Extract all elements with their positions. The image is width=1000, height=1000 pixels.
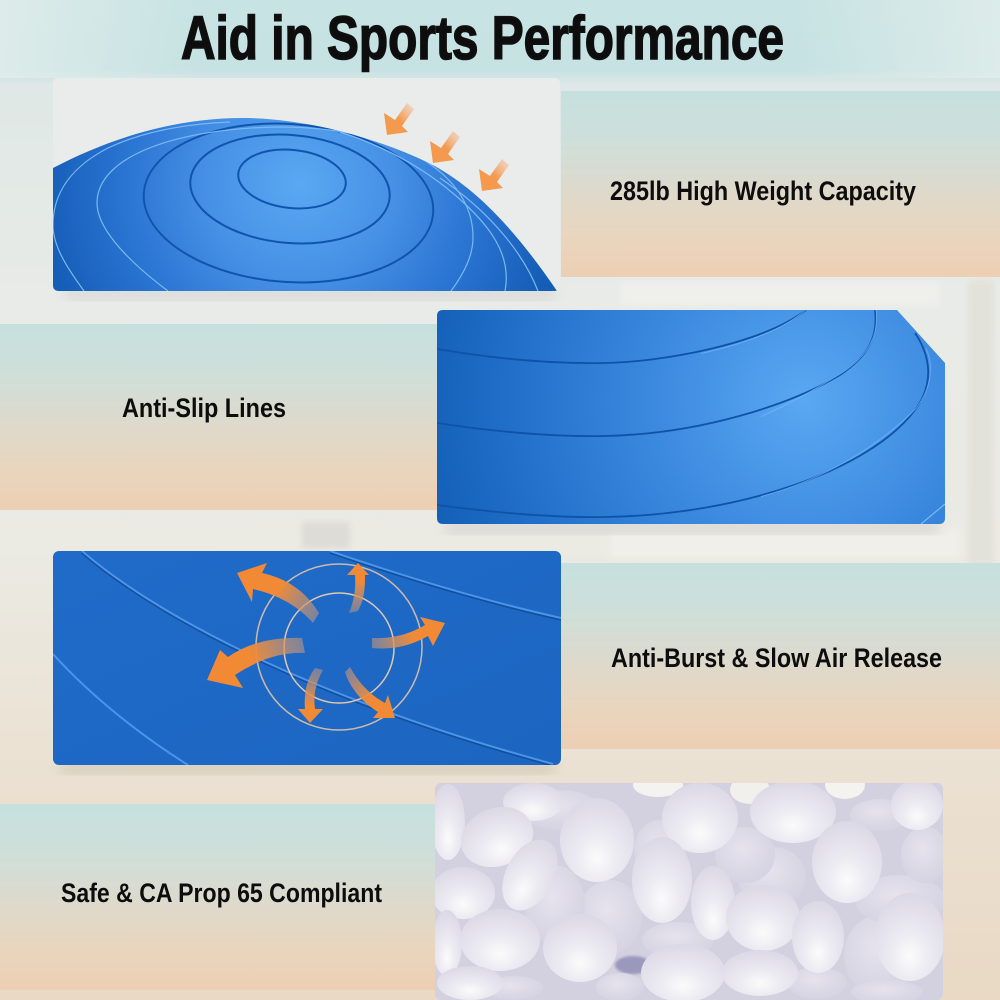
anti-slip rings: [53, 114, 538, 292]
icon: pressure arrow 2: [430, 131, 460, 163]
panel: anti-slip band: [0, 324, 437, 510]
panel: 285lb band: [561, 91, 1000, 277]
label: safe: Safe & CA Prop 65 Compliant: [61, 878, 382, 908]
arrow: upper left: [237, 563, 319, 623]
arrow: top: [347, 563, 369, 613]
panel: safe band: [0, 804, 435, 990]
icon: burst rings and arrows: [207, 563, 445, 730]
label: anti-slip: Anti-Slip Lines: [122, 393, 286, 423]
arrow: lower right: [345, 667, 395, 718]
panel: anti-slip photo: [437, 308, 945, 524]
arrow: bottom: [298, 668, 323, 723]
title: Aid in Sports Performance: [181, 4, 784, 72]
icon: pressure arrow 3: [479, 159, 509, 191]
panel: anti-burst photo: [53, 551, 561, 766]
panel: material pellets photo: [431, 771, 949, 1000]
anti-slip lines: [437, 308, 945, 524]
arrow: right: [372, 617, 445, 648]
ball seam lines: [53, 551, 561, 766]
label: anti-burst: Anti-Burst & Slow Air Release: [611, 643, 942, 673]
panel: weight capacity photo: [53, 78, 560, 292]
panel: anti-burst band: [561, 563, 1000, 749]
label: 285lb: 285lb High Weight Capacity: [610, 176, 916, 206]
pellets back layer: [483, 790, 949, 1000]
pellets front layer: [431, 780, 945, 1000]
icon: pressure arrow 1: [384, 103, 414, 135]
ball dome: [53, 118, 557, 291]
arrow: lower left: [207, 638, 305, 688]
